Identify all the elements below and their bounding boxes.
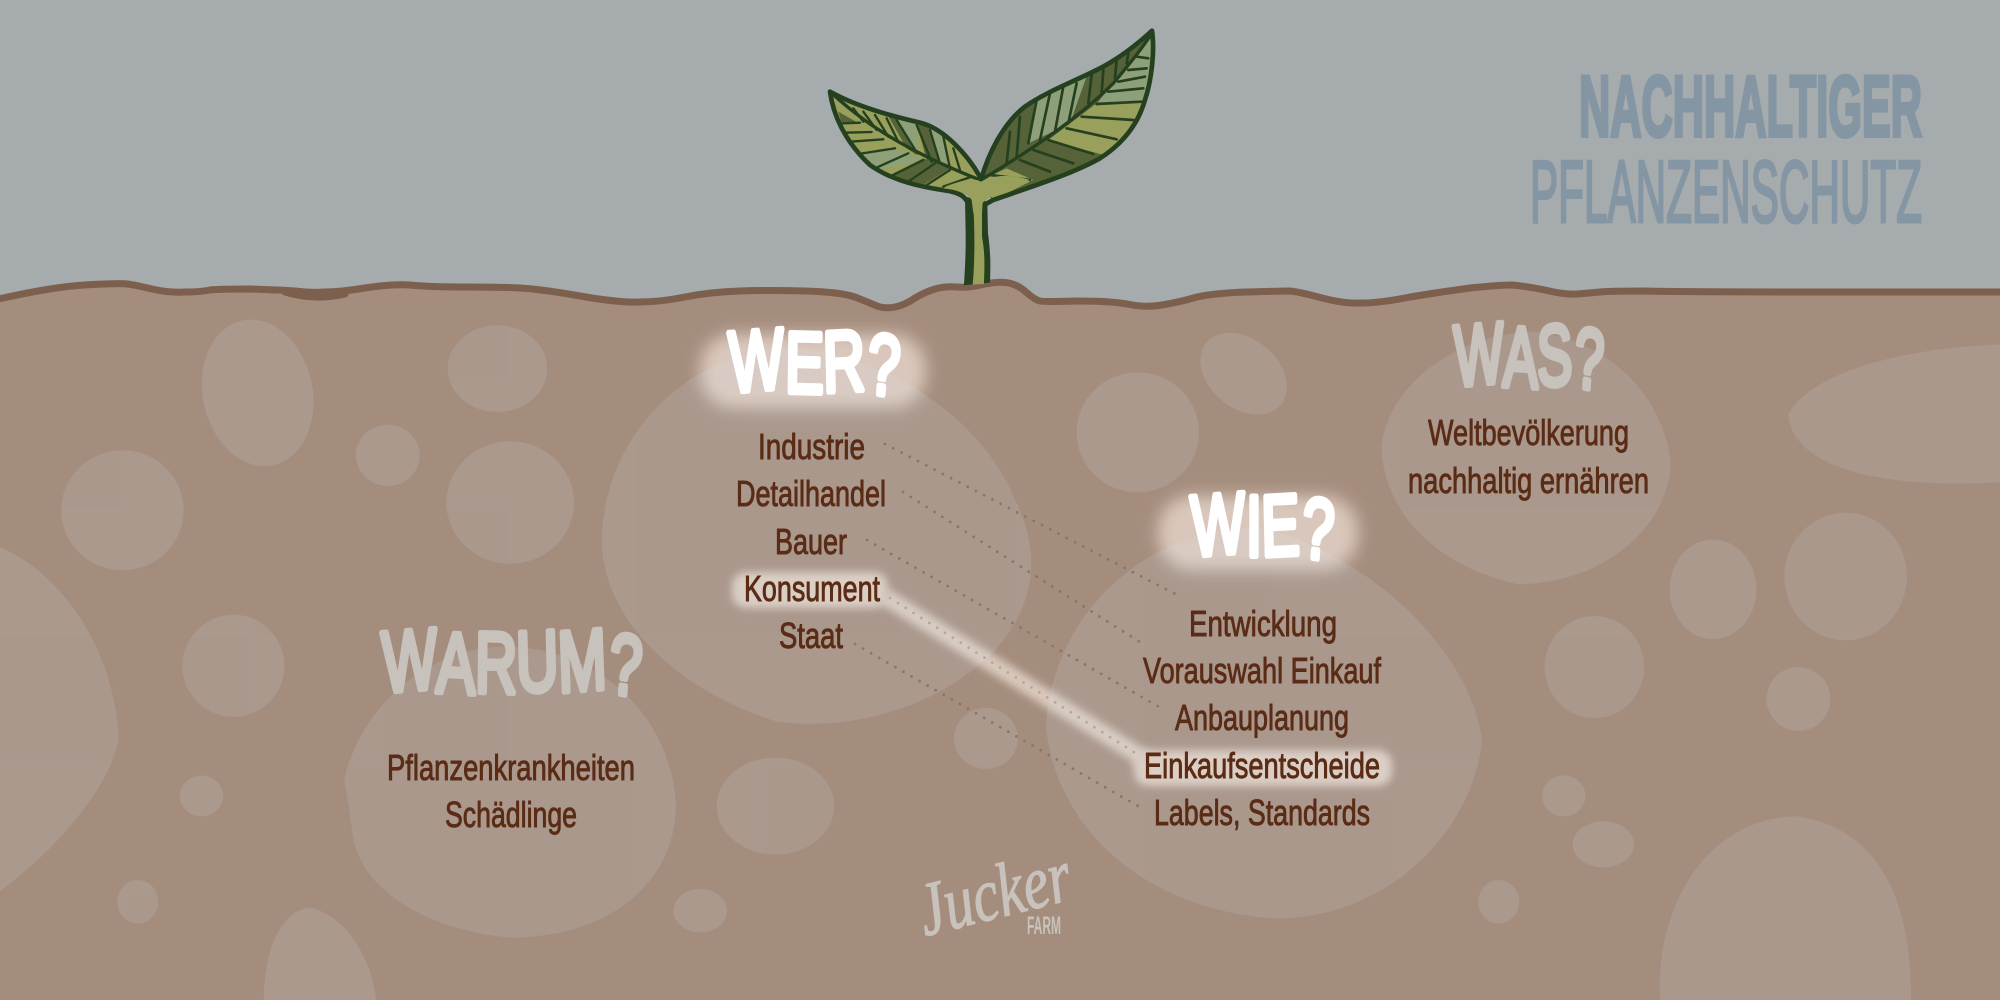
heading: WAS?: WAS? — [1451, 307, 1610, 408]
glow: Konsument — [732, 572, 888, 608]
list: actors: Konsument — [744, 568, 880, 609]
blob: bottom right — [1660, 816, 1911, 1000]
section: WIE — [1143, 476, 1382, 833]
text: goal: Weltbevölkerung — [1428, 412, 1629, 453]
seedling join — [943, 176, 1030, 213]
section: WARUM — [379, 612, 648, 835]
soil blobs — [0, 309, 2000, 1000]
list: measures: Labels, Standards — [1154, 792, 1370, 833]
right leaf — [977, 27, 1157, 207]
stem — [964, 197, 990, 285]
list: measures: Einkaufsentscheide — [1144, 745, 1380, 786]
text: goal: nachhaltig ernähren — [1408, 460, 1649, 501]
soil ground with surface line — [0, 282, 2000, 1000]
list: actors — [736, 426, 886, 656]
blob: bottom left — [264, 908, 376, 1000]
list: actors: Staat — [779, 615, 843, 656]
glow: WER — [700, 334, 926, 408]
blob: left edge — [0, 546, 119, 893]
logo: Jucker Farm: Jucker — [909, 833, 1080, 952]
highlight glows — [700, 334, 1392, 786]
glow: WIE — [1158, 496, 1358, 570]
list: measures — [1143, 603, 1382, 833]
glow: connecting band — [884, 596, 1146, 760]
section: WER — [726, 312, 906, 656]
heading: WIE?: WIE? — [1188, 476, 1340, 578]
blob: WER — [602, 347, 1031, 724]
list: measures: Vorauswahl Einkauf — [1143, 650, 1382, 691]
text: reasons: Pflanzenkrankheiten — [387, 747, 635, 788]
plant seedling — [827, 27, 1157, 285]
list: actors: Industrie — [758, 426, 865, 467]
list: measures: Entwicklung — [1189, 603, 1337, 644]
dotted connector lines — [855, 444, 1181, 806]
list: actors: Detailhandel — [736, 473, 886, 514]
section: WAS — [1408, 307, 1649, 501]
small blobs — [61, 309, 1907, 932]
ground line thick section — [285, 292, 345, 297]
text: reasons: Schädlinge — [445, 794, 577, 835]
heading: WER?: WER? — [726, 312, 906, 414]
list: actors: Bauer — [775, 521, 847, 562]
blob: WAS — [1381, 332, 1671, 584]
text: reasons — [387, 747, 635, 835]
glow: Einkaufsentscheide — [1134, 750, 1392, 786]
blob: WIE — [1046, 528, 1482, 918]
title — [1530, 59, 1922, 241]
blob: WARUM — [344, 647, 676, 937]
left leaf — [827, 87, 983, 200]
heading: WARUM?: WARUM? — [379, 612, 648, 714]
blob: right top — [1788, 344, 2000, 484]
list: measures: Anbauplanung — [1175, 697, 1349, 738]
text: goal — [1408, 412, 1649, 501]
logo: Jucker Farm: FARM — [1027, 912, 1061, 940]
